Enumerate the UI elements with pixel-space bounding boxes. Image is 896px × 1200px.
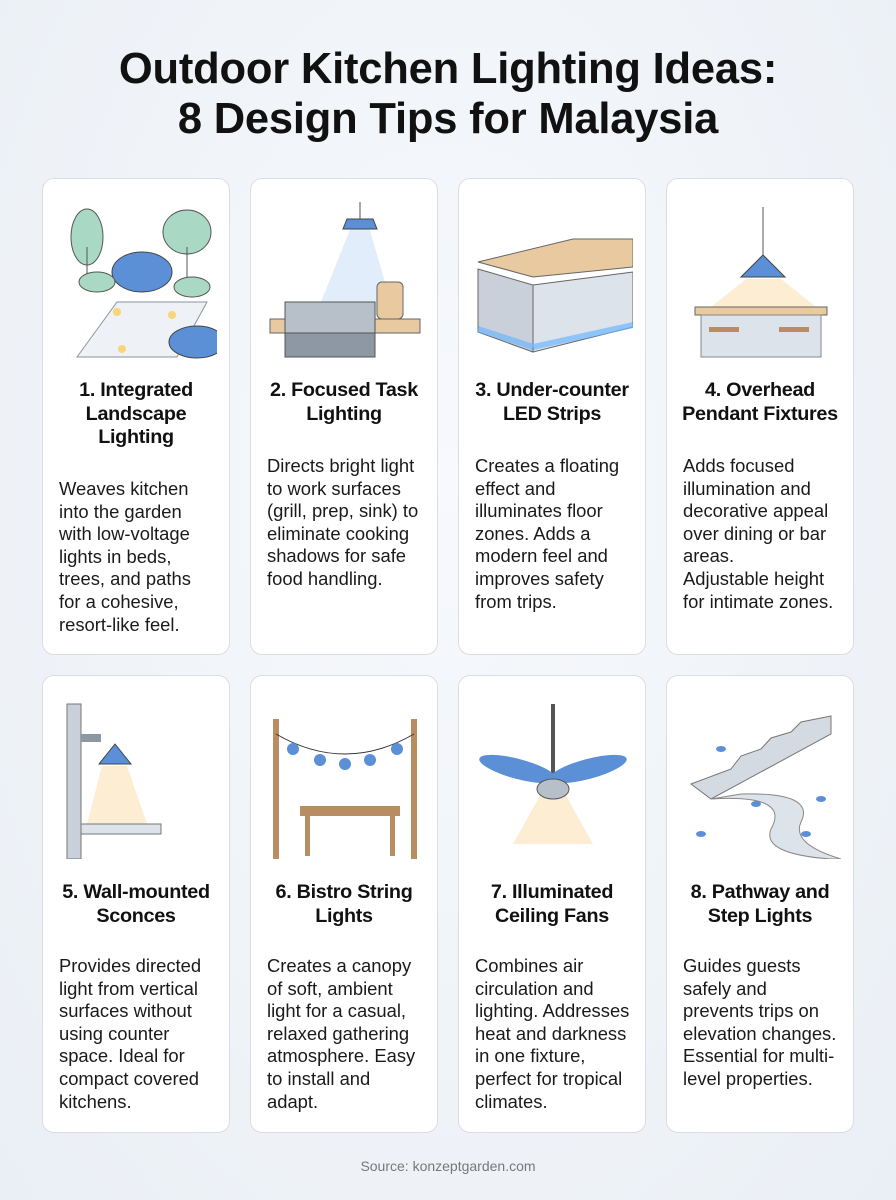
panel: pathway lights	[666, 675, 854, 1133]
text: modern feel and	[475, 545, 608, 566]
text	[59, 955, 201, 1112]
text: resort-like feel.	[59, 614, 180, 635]
text: Adds focused	[683, 455, 794, 476]
title	[119, 45, 777, 143]
icon: ceiling fan	[479, 704, 627, 844]
heading	[491, 881, 613, 926]
text: using counter	[59, 1023, 169, 1044]
text: to install and	[267, 1068, 370, 1089]
text: food handling.	[267, 568, 383, 589]
text: lights in beds,	[59, 546, 171, 567]
text: safely and	[683, 978, 767, 999]
panel: ceiling fans	[458, 675, 646, 1133]
title: 8 Design Tips for Malaysia	[178, 95, 718, 143]
text	[475, 455, 619, 612]
text: light from vertical	[59, 978, 198, 999]
heading	[475, 379, 629, 424]
text: illuminates floor	[475, 500, 603, 521]
icon: wall sconce	[66, 704, 162, 859]
panel: focused task lighting	[250, 178, 438, 655]
text	[475, 955, 629, 1112]
text: (grill, prep, sink) to	[267, 500, 418, 521]
heading	[270, 379, 418, 424]
text: kitchens.	[59, 1091, 132, 1112]
heading	[682, 379, 838, 424]
source: Source: konzeptgarden.com	[360, 1158, 536, 1174]
heading	[79, 379, 193, 448]
heading: Sconces	[96, 904, 176, 926]
heading: 3. Under-counter	[475, 379, 629, 401]
heading: 4. Overhead	[705, 379, 815, 401]
text: in one fixture,	[475, 1045, 585, 1066]
text: shadows for safe	[267, 545, 406, 566]
text: Essential for multi-	[683, 1045, 834, 1066]
heading: Step Lights	[708, 904, 812, 926]
text: areas.	[683, 545, 734, 566]
text: illumination and	[683, 478, 811, 499]
text: Creates a canopy	[267, 955, 411, 976]
text: circulation and	[475, 978, 594, 999]
panel: string lights	[250, 675, 438, 1133]
text: over dining or bar	[683, 523, 826, 544]
icon: counter with LED	[477, 238, 633, 353]
text: Adjustable height	[683, 568, 824, 589]
text: of soft, ambient	[267, 978, 393, 999]
icon: pendant lamp bar	[694, 207, 828, 358]
heading: 1. Integrated	[79, 379, 193, 401]
text: Directs bright light	[267, 455, 414, 476]
text: to work surfaces	[267, 478, 401, 499]
heading: 6. Bistro String	[276, 881, 412, 903]
text: into the garden	[59, 501, 182, 522]
text: climates.	[475, 1091, 548, 1112]
text: compact covered	[59, 1068, 199, 1089]
text: trees, and paths	[59, 568, 191, 589]
text: surfaces without	[59, 1000, 192, 1021]
text: prevents trips on	[683, 1000, 819, 1021]
icon: bistro string lights	[273, 719, 417, 859]
text: elevation changes.	[683, 1023, 836, 1044]
text: relaxed gathering	[267, 1023, 409, 1044]
text: space. Ideal for	[59, 1045, 185, 1066]
text	[683, 455, 833, 612]
text	[267, 955, 416, 1112]
text: level properties.	[683, 1068, 813, 1089]
text: light for a casual,	[267, 1000, 406, 1021]
heading: 7. Illuminated	[491, 881, 613, 903]
heading: Lights	[315, 904, 373, 926]
icon: garden	[70, 208, 217, 358]
heading: Pendant Fixtures	[682, 402, 838, 424]
heading: 5. Wall-mounted	[62, 881, 210, 903]
heading: 2. Focused Task	[270, 379, 418, 401]
text	[59, 478, 191, 635]
text: from trips.	[475, 591, 557, 612]
heading: Landscape	[86, 402, 186, 424]
heading: Lighting	[98, 426, 174, 448]
text: for a cohesive,	[59, 591, 179, 612]
heading: Ceiling Fans	[495, 904, 609, 926]
text: lighting. Addresses	[475, 1000, 629, 1021]
text: Creates a floating	[475, 455, 619, 476]
text: effect and	[475, 478, 555, 499]
text: heat and darkness	[475, 1023, 626, 1044]
panel: integrated landscape lighting	[42, 178, 230, 655]
panel: under-counter LED	[458, 178, 646, 655]
icon: steps and path	[690, 715, 841, 859]
heading	[62, 881, 210, 926]
text	[267, 455, 418, 589]
title: Outdoor Kitchen Lighting Ideas:	[119, 45, 777, 93]
icon: grill with light	[270, 202, 420, 358]
text: Guides guests	[683, 955, 801, 976]
heading	[276, 881, 412, 926]
text: zones. Adds a	[475, 523, 591, 544]
heading: 8. Pathway and	[691, 881, 829, 903]
text: improves safety	[475, 568, 604, 589]
heading: Lighting	[306, 402, 382, 424]
text: for intimate zones.	[683, 591, 833, 612]
text: with low-voltage	[59, 523, 190, 544]
text	[683, 955, 836, 1089]
text: eliminate cooking	[267, 523, 409, 544]
text: Combines air	[475, 955, 583, 976]
heading: LED Strips	[503, 402, 601, 424]
panel: sconces	[42, 675, 230, 1133]
text: Weaves kitchen	[59, 478, 188, 499]
text: adapt.	[267, 1091, 318, 1112]
text: decorative appeal	[683, 500, 828, 521]
text: Provides directed	[59, 955, 201, 976]
panel: pendant	[666, 178, 854, 655]
heading	[691, 881, 829, 926]
text: perfect for tropical	[475, 1068, 622, 1089]
text: atmosphere. Easy	[267, 1045, 415, 1066]
